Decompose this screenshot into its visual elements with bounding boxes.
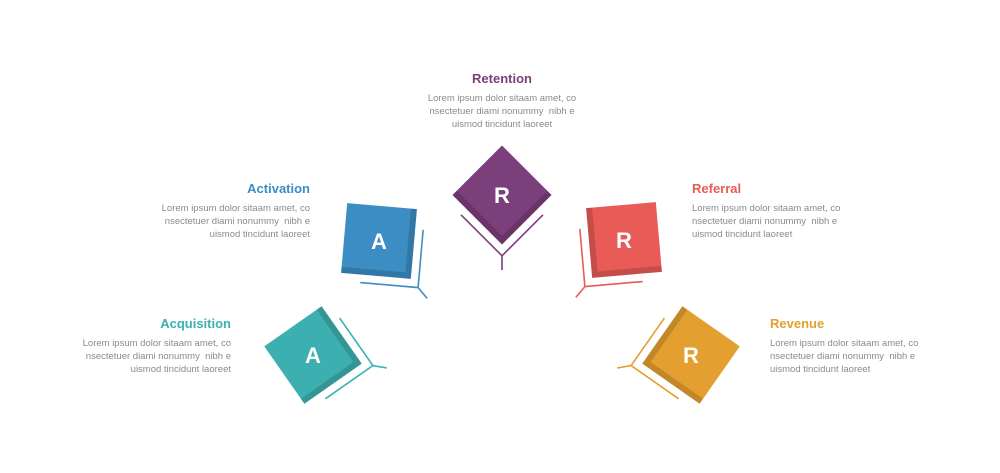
block: revenue [617,296,740,418]
text: acquisition: uismod tincidunt laoreet [131,364,231,375]
text: referral: nsectetuer diami nonummy nibh e [692,216,837,227]
block: referral [568,202,663,297]
text: activation: Activation [247,181,310,196]
block: acquisition: A [305,343,321,368]
text: activation: uismod tincidunt laoreet [210,229,310,240]
block: retention: R [494,183,510,208]
block: retention [440,146,564,270]
text: revenue: nsectetuer diami nonummy nibh e [770,351,915,362]
text: retention: uismod tincidunt laoreet [452,119,552,130]
text: referral: Lorem ipsum dolor sitaam amet, co [692,203,840,214]
text: referral: uismod tincidunt laoreet [692,229,792,240]
block: referral: R [616,228,632,253]
block: revenue: R [683,343,699,368]
text: revenue: Lorem ipsum dolor sitaam amet, co [770,338,918,349]
text: revenue: Revenue [770,316,824,331]
text: acquisition: Acquisition [160,316,231,331]
text: acquisition: Lorem ipsum dolor sitaam amet, co [83,338,231,349]
text: revenue [770,316,918,375]
text: referral [692,181,840,240]
text: activation: nsectetuer diami nonummy nibh e [165,216,310,227]
text: activation [162,181,310,240]
text: activation: Lorem ipsum dolor sitaam amet, co [162,203,310,214]
text: retention: Lorem ipsum dolor sitaam amet, co [428,93,576,104]
text: acquisition: nsectetuer diami nonummy nibh e [86,351,231,362]
text: referral: Referral [692,181,741,196]
text: retention [428,71,576,130]
text: revenue: uismod tincidunt laoreet [770,364,870,375]
text: retention: nsectetuer diami nonummy nibh e [429,106,575,117]
block: acquisition [264,296,387,418]
text: retention: Retention [472,71,532,86]
text: acquisition [83,316,231,375]
block: activation: A [371,229,387,254]
block: activation [340,203,435,298]
